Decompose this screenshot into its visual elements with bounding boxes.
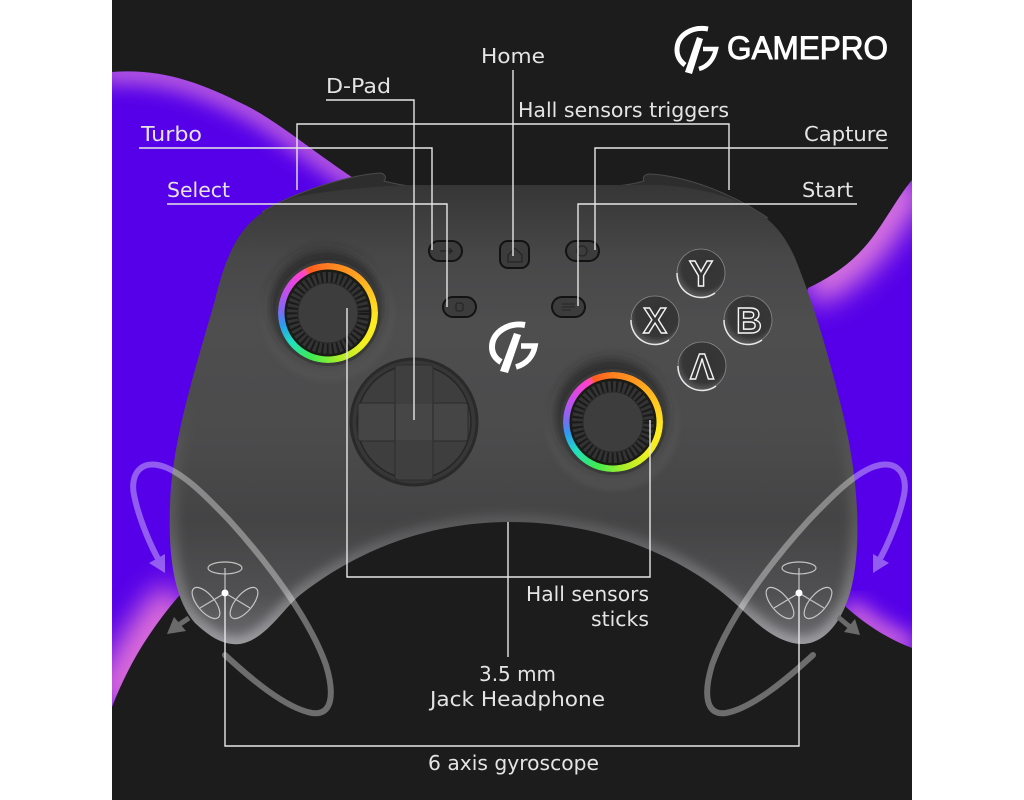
callout: turbo: Turbo [140, 122, 202, 146]
callout: hall sensors triggers: Hall sensors triggers [518, 98, 729, 122]
left rotation loop arrow [133, 465, 331, 713]
button B: B [736, 300, 762, 341]
button Y: Y [689, 253, 713, 294]
turbo button [429, 241, 462, 261]
left stick [278, 263, 378, 363]
callout: start: Start [802, 178, 853, 202]
button X: X [643, 300, 667, 341]
home button [500, 241, 529, 268]
capture button [566, 241, 599, 261]
callout: start [578, 178, 857, 306]
controller logo mark [492, 324, 535, 373]
controller body [170, 185, 857, 644]
button X [631, 296, 679, 345]
brand logo [677, 28, 888, 74]
select button [443, 297, 476, 317]
callout: hall sensors sticks [347, 308, 650, 631]
button B [724, 296, 772, 345]
callout: 6 axis gyroscope: 6 axis gyroscope [428, 751, 599, 775]
left stick socket [261, 248, 395, 382]
left gyroscope icon [187, 562, 263, 623]
callout: capture [595, 122, 888, 250]
callout: headphone jack: Jack Headphone [428, 687, 605, 711]
brand logo: GAMEPRO [727, 30, 888, 66]
callout: capture: Capture [804, 122, 888, 146]
callout: 6 axis gyroscope [222, 590, 802, 775]
callout: hall sensors sticks: sticks [591, 607, 649, 631]
callout: home: Home [481, 44, 545, 68]
callout: hall sensors triggers [297, 98, 729, 190]
callout: select [167, 178, 447, 307]
right trigger [600, 174, 768, 218]
left motion arrow grey [167, 617, 189, 634]
callout: turbo [139, 122, 432, 250]
callout: d-pad: D-Pad [326, 74, 391, 98]
right motion arrow grey [838, 617, 860, 635]
callout: headphone jack: 3.5 mm [479, 662, 556, 686]
callout: select: Select [167, 178, 230, 202]
button Y [677, 249, 725, 298]
callout: headphone jack [428, 522, 605, 711]
right stick socket [546, 357, 680, 491]
start button [552, 297, 585, 317]
d-pad [351, 359, 477, 485]
callout: d-pad [326, 74, 414, 420]
right gyroscope icon [761, 562, 837, 623]
button A: Λ [690, 346, 714, 387]
purple blob left [112, 71, 352, 707]
callout: hall sensors sticks: Hall sensors [526, 582, 649, 606]
purple blob right [807, 180, 912, 648]
right rotation loop arrow [707, 465, 905, 713]
button A [678, 342, 726, 391]
left trigger [262, 173, 420, 212]
dark background panel [112, 0, 912, 800]
right stick [563, 372, 663, 472]
